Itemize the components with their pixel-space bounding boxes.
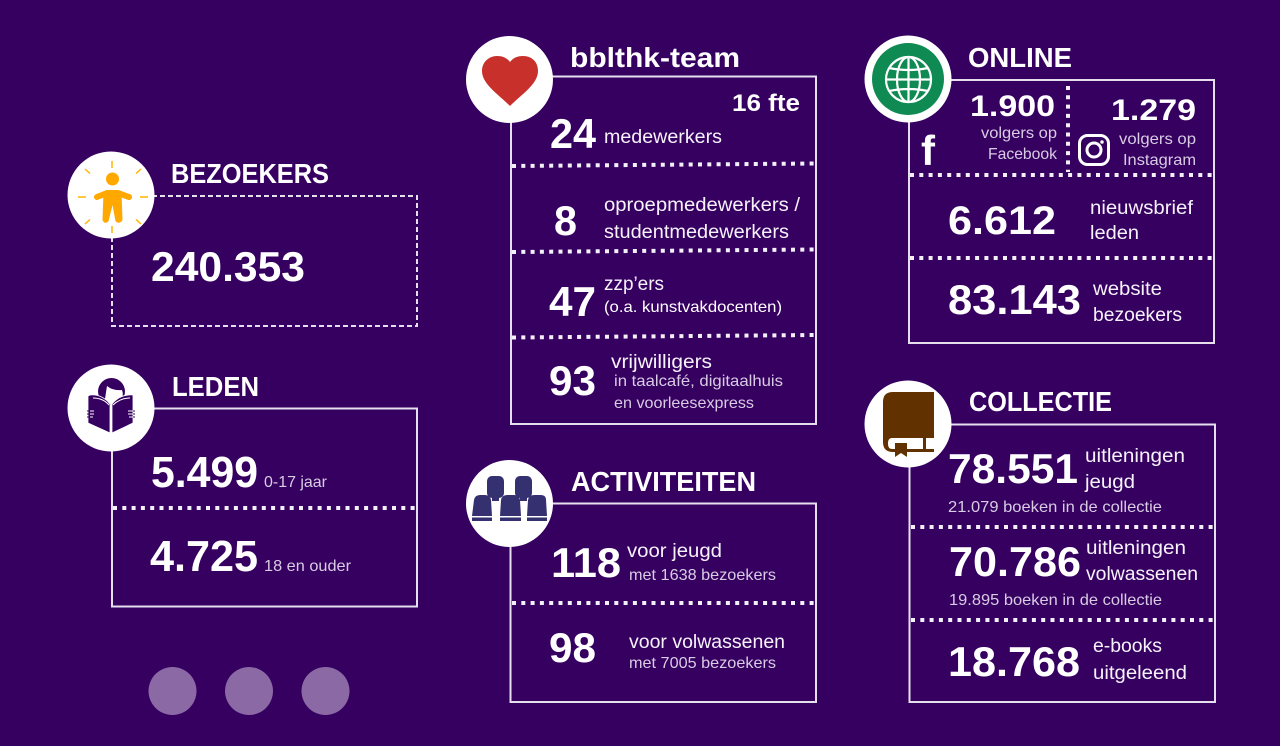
stat: instagram: volgers op <box>1119 131 1196 148</box>
stat: uitleningen volwassenen: 70.786 <box>949 538 1081 585</box>
icon: instagram <box>1080 136 1108 164</box>
dividers <box>911 527 1214 620</box>
stat: facebook: volgers op <box>981 125 1057 142</box>
stat: website <box>948 276 1182 326</box>
stat: uitleningen jeugd: uitleningen <box>1085 446 1185 467</box>
stat: 8 oproepmedewerkers: studentmedewerkers <box>604 222 789 243</box>
stat: 93 vrijwilligers: vrijwilligers <box>611 352 712 373</box>
stat: instagram <box>1080 94 1196 169</box>
activiteiten box <box>510 504 816 702</box>
stat: 4.725: 4.725 <box>150 532 258 581</box>
stat: 98 voor volwassenen: voor volwassenen <box>629 632 785 653</box>
panel: bezoekers <box>68 152 417 326</box>
team box <box>511 76 816 424</box>
bezoekers box <box>112 196 417 326</box>
heading: online: ONLINE <box>968 42 1072 73</box>
stat: 93 vrijwilligers <box>549 352 783 412</box>
panel: collectie <box>864 380 1215 702</box>
stat: uitleningen volwassenen <box>949 538 1198 609</box>
stat: 4.725: 18 en ouder <box>264 558 352 575</box>
stat: uitleningen volwassenen: 19.895 boeken in de collectie <box>949 592 1162 609</box>
stat: uitleningen jeugd: jeugd <box>1084 472 1135 493</box>
decorative dots row <box>148 667 350 715</box>
stat: website: website <box>1092 279 1162 300</box>
heading: bezoekers: BEZOEKERS <box>171 158 329 189</box>
icon: facebook f: f <box>921 127 936 174</box>
stat: uitleningen jeugd: 21.079 boeken in de collectie <box>948 499 1162 516</box>
stat: nieuwsbrief: leden <box>1090 223 1139 244</box>
stat: nieuwsbrief: 6.612 <box>948 199 1056 243</box>
stat: 5.499: 5.499 <box>151 448 258 497</box>
stat: uitleningen jeugd <box>948 445 1185 516</box>
stat: nieuwsbrief <box>948 198 1194 244</box>
stat: 5.499 <box>151 448 328 497</box>
panel: online <box>864 36 1214 343</box>
panel: activiteiten <box>466 460 816 702</box>
stat: uitleningen volwassenen: volwassenen <box>1086 564 1198 585</box>
number: 240.353: 240.353 <box>151 243 305 290</box>
stat: 93 vrijwilligers: in taalcafé, digitaalhuis <box>614 373 783 390</box>
stat: instagram: 1.279 <box>1111 94 1196 127</box>
collectie box <box>910 424 1215 702</box>
stat: 47 zzp'ers: 47 <box>549 278 596 325</box>
stat: 8 oproepmedewerkers: oproepmedewerkers / <box>604 195 801 216</box>
heading: activiteiten: ACTIVITEITEN <box>571 466 756 497</box>
icon: heart <box>466 36 553 123</box>
stat: 5.499: 0-17 jaar <box>264 474 328 491</box>
stat: e-books: e-books <box>1093 636 1162 657</box>
stat: 118 voor jeugd: 118 <box>551 539 621 586</box>
icon: person reading book <box>68 364 154 452</box>
dividers <box>910 86 1213 258</box>
stat: uitleningen jeugd: 78.551 <box>948 445 1078 492</box>
stat: 47 zzp'ers: zzp’ers <box>604 274 664 295</box>
icon: person with rays <box>68 152 154 238</box>
panel: leden <box>68 364 417 606</box>
stat: 93 vrijwilligers: en voorleesexpress <box>614 395 754 412</box>
stat: website: 83.143 <box>948 276 1081 323</box>
stat: facebook: Facebook <box>988 146 1058 163</box>
stat: e-books: uitgeleend <box>1093 663 1187 684</box>
stat: 24 medewerkers <box>550 110 722 157</box>
stat: 93 vrijwilligers: 93 <box>549 357 596 404</box>
stat: 24 medewerkers: 24 <box>550 110 597 157</box>
stat: 8 oproepmedewerkers: 8 <box>554 197 577 244</box>
icon: book with bookmark <box>864 380 952 468</box>
leden box <box>112 408 417 606</box>
stat: 47 zzp'ers <box>549 274 782 325</box>
heading: leden: LEDEN <box>172 371 259 402</box>
heading: bblthk-team: bblthk-team <box>570 42 740 73</box>
stat: instagram: Instagram <box>1123 152 1196 169</box>
stat: facebook: 1.900 <box>970 90 1055 123</box>
divider <box>512 601 815 605</box>
stat: 4.725 <box>150 532 352 581</box>
stat: e-books <box>948 636 1187 685</box>
stat: 47 zzp'ers: (o.a. kunstvakdocenten) <box>604 299 782 316</box>
stat: 24 medewerkers: medewerkers <box>604 127 722 148</box>
stat: 118 voor jeugd: voor jeugd <box>627 541 722 562</box>
stat: 118 voor jeugd <box>551 539 776 586</box>
stat: 98 voor volwassenen: 98 <box>549 624 596 671</box>
fte label: 16 fte <box>732 90 800 117</box>
icon: theatre seats <box>466 460 553 547</box>
stat: 118 voor jeugd: met 1638 bezoekers <box>629 567 776 584</box>
stat: website: bezoekers <box>1093 305 1182 326</box>
heading: collectie: COLLECTIE <box>969 386 1112 417</box>
stat: 8 oproepmedewerkers <box>554 195 801 244</box>
dividers <box>512 164 815 338</box>
stat: nieuwsbrief: nieuwsbrief <box>1090 198 1194 219</box>
divider <box>113 506 416 510</box>
icon: globe <box>864 36 952 122</box>
stat: uitleningen volwassenen: uitleningen <box>1086 538 1186 559</box>
panel: bblthk-team <box>466 36 816 424</box>
stat: e-books: 18.768 <box>948 638 1080 685</box>
stat: facebook <box>921 90 1058 174</box>
stat: 98 voor volwassenen: met 7005 bezoekers <box>629 655 776 672</box>
stat: 98 voor volwassenen <box>549 624 785 672</box>
online box <box>909 80 1214 343</box>
